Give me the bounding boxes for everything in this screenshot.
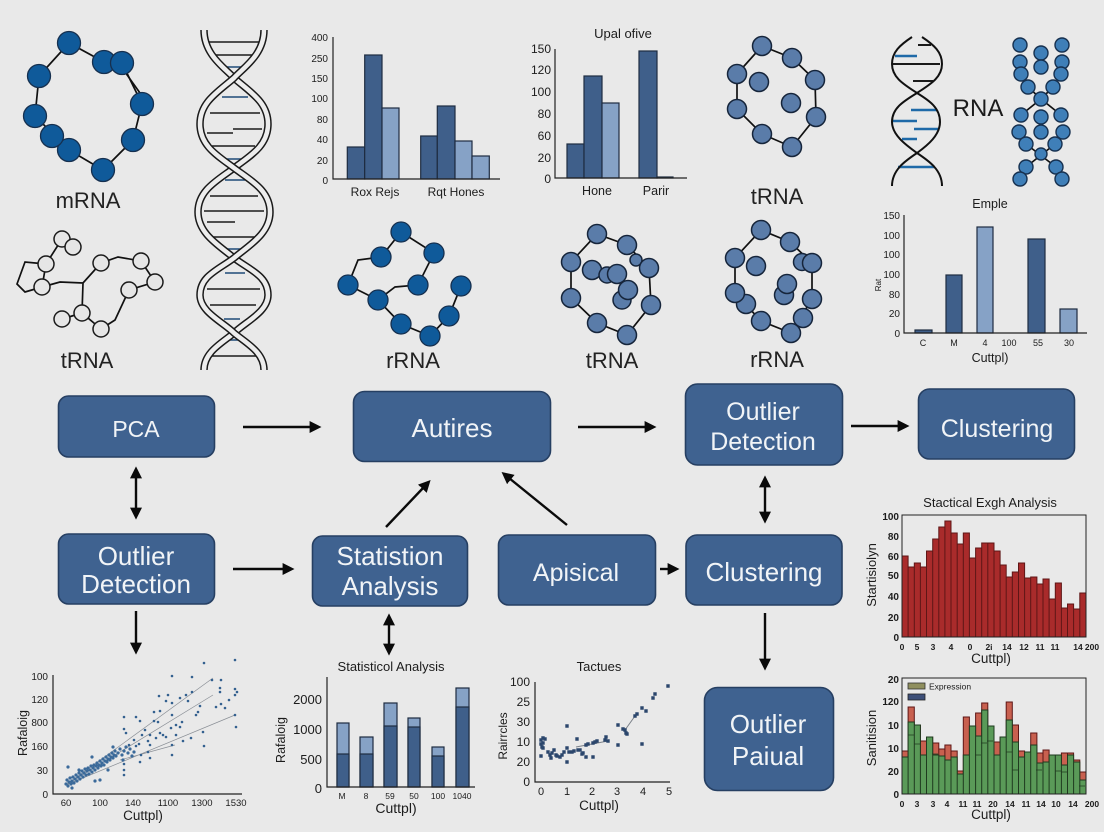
chart: Emple bars: 20 — [889, 309, 900, 320]
chart: Statistical Analysis stacked bars: M — [338, 791, 346, 801]
chart: grouped bars Rox Rejs: 20 — [317, 156, 328, 167]
box: Apisical — [498, 535, 656, 605]
label: rRNA: rRNA — [386, 348, 440, 373]
chart: Emple bars: Emple — [972, 197, 1008, 211]
chart: grouped bars Rox Rejs: 400 — [311, 33, 328, 44]
icon: tRNA ring centre — [562, 224, 660, 344]
chart: red histogram: 14 — [1002, 642, 1012, 652]
chart: red histogram: 3 — [931, 642, 936, 652]
arrow: PCA to Autires — [243, 426, 312, 428]
chart: Emple bars: 4 — [982, 338, 988, 348]
chart: scatter with trend lines: 60 — [61, 798, 71, 809]
box: Statistion Analysis: Analysis — [342, 571, 438, 601]
chart: grouped bars Rox Rejs: 0 — [322, 176, 328, 187]
chart: Statistical Analysis stacked bars: Cuttpl) — [375, 800, 417, 816]
chart: green and red stacked histogram: 14 — [1068, 799, 1078, 809]
arrow: Outlier Detection to scatter — [135, 611, 137, 645]
chart: scatter with trend lines: 1300 — [191, 798, 213, 809]
arrow: Statistion Analysis to Autires — [386, 487, 424, 527]
chart: red histogram: 12 — [1019, 642, 1029, 652]
chart: green and red stacked histogram: Cuttpl) — [971, 807, 1011, 822]
chart: red histogram: 100 — [882, 512, 899, 523]
box: Clustering top — [918, 389, 1074, 459]
chart: Upal ofive bars: 100 — [531, 85, 551, 99]
chart: Tactues scatter: 100 — [510, 675, 530, 689]
chart: Tactues scatter: 4 — [640, 786, 646, 798]
chart: green and red stacked histogram: Sanitision — [864, 710, 879, 766]
chart: Upal ofive bars: 0 — [544, 172, 551, 186]
chart: grouped bars Rox Rejs: 100 — [311, 94, 328, 105]
chart: Statistical Analysis stacked bars — [274, 659, 475, 816]
chart: Emple bars: Rat — [874, 278, 883, 291]
chart: green and red stacked histogram: 11 — [1022, 799, 1031, 809]
chart: Emple bars: C — [920, 338, 927, 348]
chart: Statistical Analysis stacked bars: 500 — [300, 752, 322, 767]
chart: Tactues scatter: 2 — [589, 786, 595, 798]
icon: rRNA chain — [338, 222, 471, 346]
chart: Tactues scatter: 20 — [517, 755, 530, 769]
chart: Statistical Analysis stacked bars: 2000 — [293, 692, 322, 707]
box: Apisical: Apisical — [533, 559, 619, 587]
chart: grouped bars Rox Rejs: Rqt Hones — [428, 185, 484, 199]
chart: Emple bars: 100 — [1001, 338, 1017, 348]
chart: Tactues scatter: 25 — [517, 695, 530, 709]
chart: Tactues scatter: 30 — [517, 715, 530, 729]
chart: green and red stacked histogram: 10 — [888, 721, 899, 732]
chart: Tactues scatter: 0 — [523, 775, 530, 789]
box: Outlier Detection top — [686, 384, 842, 465]
chart: Upal ofive bars: 80 — [538, 107, 551, 121]
chart: Tactues scatter: 1 — [564, 786, 570, 798]
chart: Emple bars: 55 — [1033, 338, 1043, 348]
arrow: Outlier Detection to Clustering — [851, 425, 900, 427]
chart: scatter with trend lines: Cuttpl) — [123, 808, 163, 823]
label: tRNA top right: tRNA — [751, 184, 804, 209]
chart: Upal ofive bars: 150 — [531, 42, 551, 56]
chart: red histogram: 20 — [888, 613, 899, 624]
chart: Tactues scatter: 0 — [538, 786, 544, 798]
box: PCA: PCA — [112, 416, 160, 442]
chart: grouped bars Rox Rejs: 250 — [311, 54, 328, 65]
chart: green and red stacked histogram: 0 — [893, 790, 899, 801]
chart: Statistical Analysis stacked bars: 0 — [315, 781, 322, 796]
arrow: Outlier Detection to Clustering two-way — [764, 485, 766, 514]
icon: tRNA ring top right — [728, 36, 826, 156]
arrow: Clustering to Outlier Paiual — [764, 613, 766, 661]
box: Clustering top: Clustering — [941, 415, 1053, 443]
chart: scatter with trend lines: 140 — [125, 798, 141, 809]
chart: grouped bars Rox Rejs: Rox Rejs — [351, 185, 399, 199]
label: tRNA left: tRNA — [61, 348, 114, 373]
chart: green and red stacked histogram: 4 — [945, 799, 950, 809]
box: PCA — [58, 396, 214, 457]
chart: Tactues scatter: Cuttpl) — [579, 798, 619, 813]
box: Outlier Detection left: Detection — [81, 569, 191, 599]
chart: Tactues scatter: 10 — [517, 735, 530, 749]
chart: Tactues scatter: 3 — [614, 786, 620, 798]
box: Outlier Paiual — [704, 688, 834, 790]
chart: Statistical Analysis stacked bars: Statisticol Analysis — [338, 659, 445, 674]
chart: Emple bars: 30 — [1064, 338, 1074, 348]
chart: green and red stacked histogram: 0 — [900, 799, 905, 809]
chart: Upal ofive bars: Parir — [643, 184, 669, 198]
icon: tRNA outline structure — [17, 231, 163, 337]
chart: red histogram: 50 — [888, 571, 899, 582]
chart: red histogram: 0 — [893, 633, 899, 644]
chart: scatter with trend lines: 120 — [31, 695, 48, 706]
icon: large DNA double helix — [198, 30, 270, 370]
chart: scatter with trend lines: 800 — [31, 718, 48, 729]
chart: Upal ofive bars: Hone — [582, 184, 612, 198]
box: Clustering middle — [686, 535, 842, 605]
chart: red histogram: 4 — [949, 642, 954, 652]
chart: red histogram: Cuttpl) — [971, 651, 1011, 666]
chart: green and red stacked histogram: 10 — [888, 744, 899, 755]
arrow: PCA to Outlier Detection two-way — [135, 476, 137, 510]
chart: red histogram: Startisiolyn — [864, 543, 879, 607]
chart: green and red stacked histogram: 20 — [888, 675, 899, 686]
chart: scatter with trend lines: 30 — [37, 766, 48, 777]
chart: Upal ofive bars: 120 — [531, 63, 551, 77]
chart: Tactues scatter: Tactues — [577, 659, 622, 674]
chart: Emple bars: 0 — [894, 329, 900, 340]
arrow: Autires to Outlier Detection — [578, 426, 647, 428]
chart: grouped bars Rox Rejs: 150 — [311, 74, 328, 85]
chart: red histogram: 80 — [888, 532, 899, 543]
icon: RNA ball cluster — [1012, 38, 1070, 186]
chart: Emple bars: M — [950, 338, 958, 348]
chart: green and red stacked histogram: 20 — [988, 799, 998, 809]
chart: red histogram: 11 — [1036, 642, 1045, 652]
chart: Statistical Analysis stacked bars: 59 — [385, 791, 395, 801]
box: Outlier Detection top: Detection — [710, 428, 816, 456]
chart: green and red stacked histogram — [864, 675, 1099, 822]
arrow: Apisical to Autires — [509, 478, 567, 525]
chart: scatter with trend lines: 0 — [42, 790, 48, 801]
label: tRNA centre: tRNA — [586, 348, 639, 373]
chart: green and red stacked histogram: 10 — [1051, 799, 1061, 809]
box: Statistion Analysis — [312, 536, 468, 606]
chart: Tactues scatter: Rairrcles — [496, 712, 510, 760]
box: Outlier Paiual: Paiual — [732, 741, 804, 771]
chart: grouped bars Rox Rejs: 80 — [317, 115, 328, 126]
box: Clustering middle: Clustering — [705, 557, 823, 587]
icon: rRNA ring right — [726, 220, 822, 342]
chart: Statistical Analysis stacked bars: 50 — [409, 791, 419, 801]
chart: scatter with trend lines: 100 — [92, 798, 108, 809]
chart: Emple bars: 80 — [889, 290, 900, 301]
chart: Emple bars: 150 — [883, 211, 900, 222]
chart: red histogram: 0 — [900, 642, 905, 652]
box: Autires: Autires — [412, 413, 492, 443]
chart: green and red stacked histogram: 11 — [958, 799, 968, 809]
chart: red histogram: 40 — [888, 592, 899, 603]
chart: Statistical Analysis stacked bars: Rafaloig — [274, 717, 288, 763]
chart: green and red stacked histogram: 3 — [931, 799, 936, 809]
chart: scatter with trend lines — [16, 660, 247, 823]
chart: Upal ofive bars: 60 — [538, 129, 551, 143]
chart: Emple bars: 100 — [883, 231, 900, 242]
box: Outlier Paiual: Outlier — [730, 709, 807, 739]
chart: Upal ofive bars: Upal ofive — [594, 26, 652, 41]
chart: Emple bars: 100 — [883, 250, 900, 261]
box: Outlier Detection top: Outlier — [726, 398, 800, 426]
box: Autires — [354, 392, 550, 462]
box: Outlier Detection left — [58, 534, 214, 604]
chart: green and red stacked histogram: Expression — [929, 682, 971, 692]
chart: Tactues scatter: 5 — [666, 786, 672, 798]
chart: Statistical Analysis stacked bars: 1000 — [293, 722, 322, 737]
chart: red histogram: 60 — [888, 552, 899, 563]
chart: red histogram: 11 — [1050, 642, 1060, 652]
chart: scatter with trend lines: 1100 — [158, 798, 178, 809]
chart: grouped bars Rox Rejs: 40 — [317, 135, 328, 146]
chart: green and red stacked histogram: 3 — [915, 799, 920, 809]
chart: Upal ofive bars: 20 — [538, 151, 551, 165]
chart: red histogram: 5 — [915, 642, 920, 652]
chart: green and red stacked histogram: 20 — [888, 767, 899, 778]
chart: red histogram: 2i — [985, 642, 993, 652]
icon: small DNA helix — [892, 37, 942, 186]
label: RNA: RNA — [953, 95, 1003, 122]
arrow: Apisical to Clustering — [660, 568, 670, 570]
chart: Emple bars — [874, 197, 1087, 365]
chart: scatter with trend lines: Rafaloig — [16, 710, 30, 756]
chart: green and red stacked histogram: 200 — [1085, 799, 1099, 809]
chart: green and red stacked histogram: 14 — [1005, 799, 1015, 809]
chart: Upal ofive bars — [531, 26, 687, 198]
chart: Statistical Analysis stacked bars: 100 — [431, 791, 445, 801]
chart: red histogram: 0 — [968, 642, 973, 652]
chart: Emple bars: 100 — [883, 270, 900, 281]
arrow: Statistion Analysis to bar chart two-way — [388, 623, 390, 646]
arrow: Outlier Detection to Statistion Analysis — [233, 568, 285, 570]
chart: Emple bars: Cuttpl) — [972, 351, 1008, 365]
chart: green and red stacked histogram: 11 — [972, 799, 982, 809]
box: Statistion Analysis: Statistion — [337, 541, 443, 571]
icon: mRNA ring — [24, 32, 154, 182]
chart: Statistical Analysis stacked bars: 8 — [364, 791, 369, 801]
chart: Tactues scatter — [496, 659, 672, 813]
chart: red histogram: 200 — [1085, 642, 1099, 652]
chart: green and red stacked histogram: 14 — [1036, 799, 1046, 809]
chart: grouped bars Rox Rejs — [311, 33, 500, 199]
chart: red histogram: Stactical Exgh Analysis — [923, 495, 1057, 510]
box: Outlier Detection left: Outlier — [98, 541, 175, 571]
label: rRNA right: rRNA — [750, 347, 804, 372]
chart: scatter with trend lines: 160 — [31, 742, 48, 753]
label: mRNA: mRNA — [56, 188, 121, 213]
chart: scatter with trend lines: 1530 — [225, 798, 247, 809]
chart: scatter with trend lines: 100 — [31, 672, 48, 683]
chart: red histogram — [864, 495, 1099, 666]
chart: Statistical Analysis stacked bars: 1040 — [453, 791, 472, 801]
chart: red histogram: 14 — [1073, 642, 1083, 652]
chart: green and red stacked histogram: 120 — [882, 697, 899, 708]
